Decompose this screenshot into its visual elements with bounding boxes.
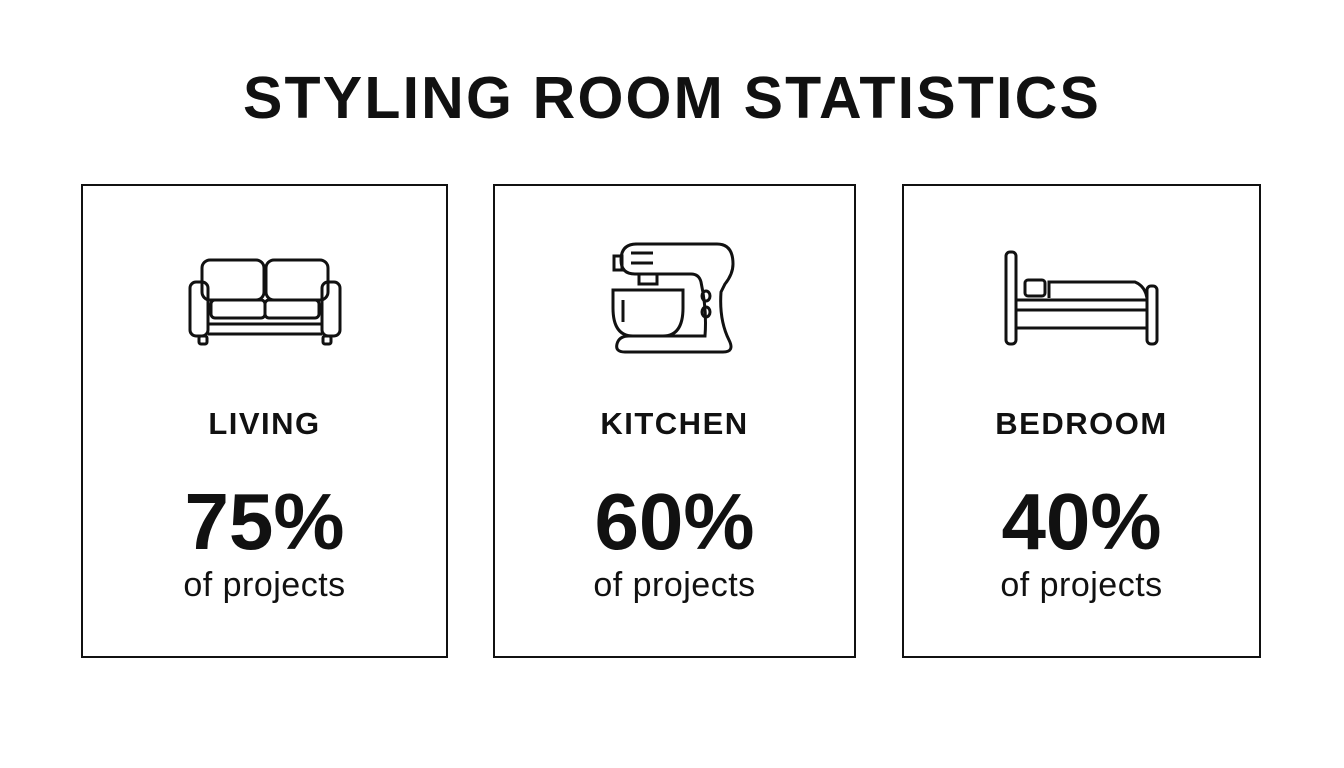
stat: 40% <box>1001 477 1162 566</box>
caption: of projects <box>593 566 756 604</box>
icon: bed <box>1004 250 1158 346</box>
icon: sofa <box>188 258 342 346</box>
caption: of projects <box>1000 566 1163 604</box>
caption: of projects <box>183 566 346 604</box>
icon: mixer <box>612 242 734 354</box>
label: BEDROOM <box>995 406 1168 441</box>
label: LIVING <box>208 406 321 441</box>
panel: living <box>81 184 448 658</box>
title: STYLING ROOM STATISTICS <box>243 65 1101 131</box>
label: KITCHEN <box>600 406 749 441</box>
stat: 75% <box>184 477 345 566</box>
panel: kitchen <box>493 184 856 658</box>
stat: 60% <box>594 477 755 566</box>
panel: bedroom <box>902 184 1261 658</box>
